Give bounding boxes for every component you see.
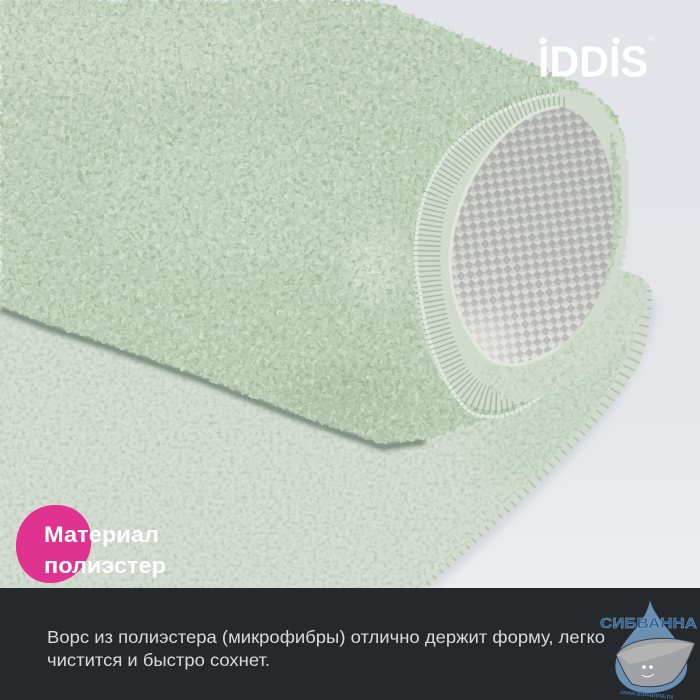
stitched edge line bbox=[416, 94, 580, 417]
ribbed binding band around roll end bbox=[413, 94, 612, 417]
rolled mat body bbox=[0, 0, 640, 450]
watermark logo: Sibvanna drop with bathtub bbox=[600, 600, 697, 700]
caption text: чистится и быстро сохнет. bbox=[47, 650, 270, 670]
roll contact shadow bbox=[0, 309, 425, 447]
watermark name: СИБВАННА bbox=[600, 615, 697, 632]
tub rim bbox=[618, 643, 692, 664]
fluffy rim at roll tip bbox=[560, 92, 626, 318]
backing edge highlight bbox=[450, 107, 560, 365]
water drop bbox=[615, 600, 687, 693]
flat mat lying on floor bbox=[0, 270, 700, 590]
tub face bbox=[642, 665, 654, 677]
mat binding edge bbox=[430, 290, 652, 588]
IDDIS brand logo: ® bbox=[648, 35, 654, 44]
badge heading bbox=[44, 522, 166, 578]
folded inner flap bbox=[469, 270, 648, 404]
caption text bbox=[47, 627, 605, 670]
pink badge blob bbox=[16, 505, 91, 583]
IDDIS brand logo: IDDIS bbox=[538, 38, 648, 86]
shadow under mat on floor bbox=[427, 300, 652, 588]
dark caption band bbox=[0, 588, 700, 700]
caption text: Ворс из полиэстера (микрофибры) отлично держит форму, легко bbox=[47, 627, 605, 647]
badge heading: Материал bbox=[44, 522, 159, 547]
non-slip backing underside bbox=[452, 107, 614, 363]
badge heading: полиэстер bbox=[44, 553, 166, 578]
bathtub body bbox=[616, 638, 695, 687]
